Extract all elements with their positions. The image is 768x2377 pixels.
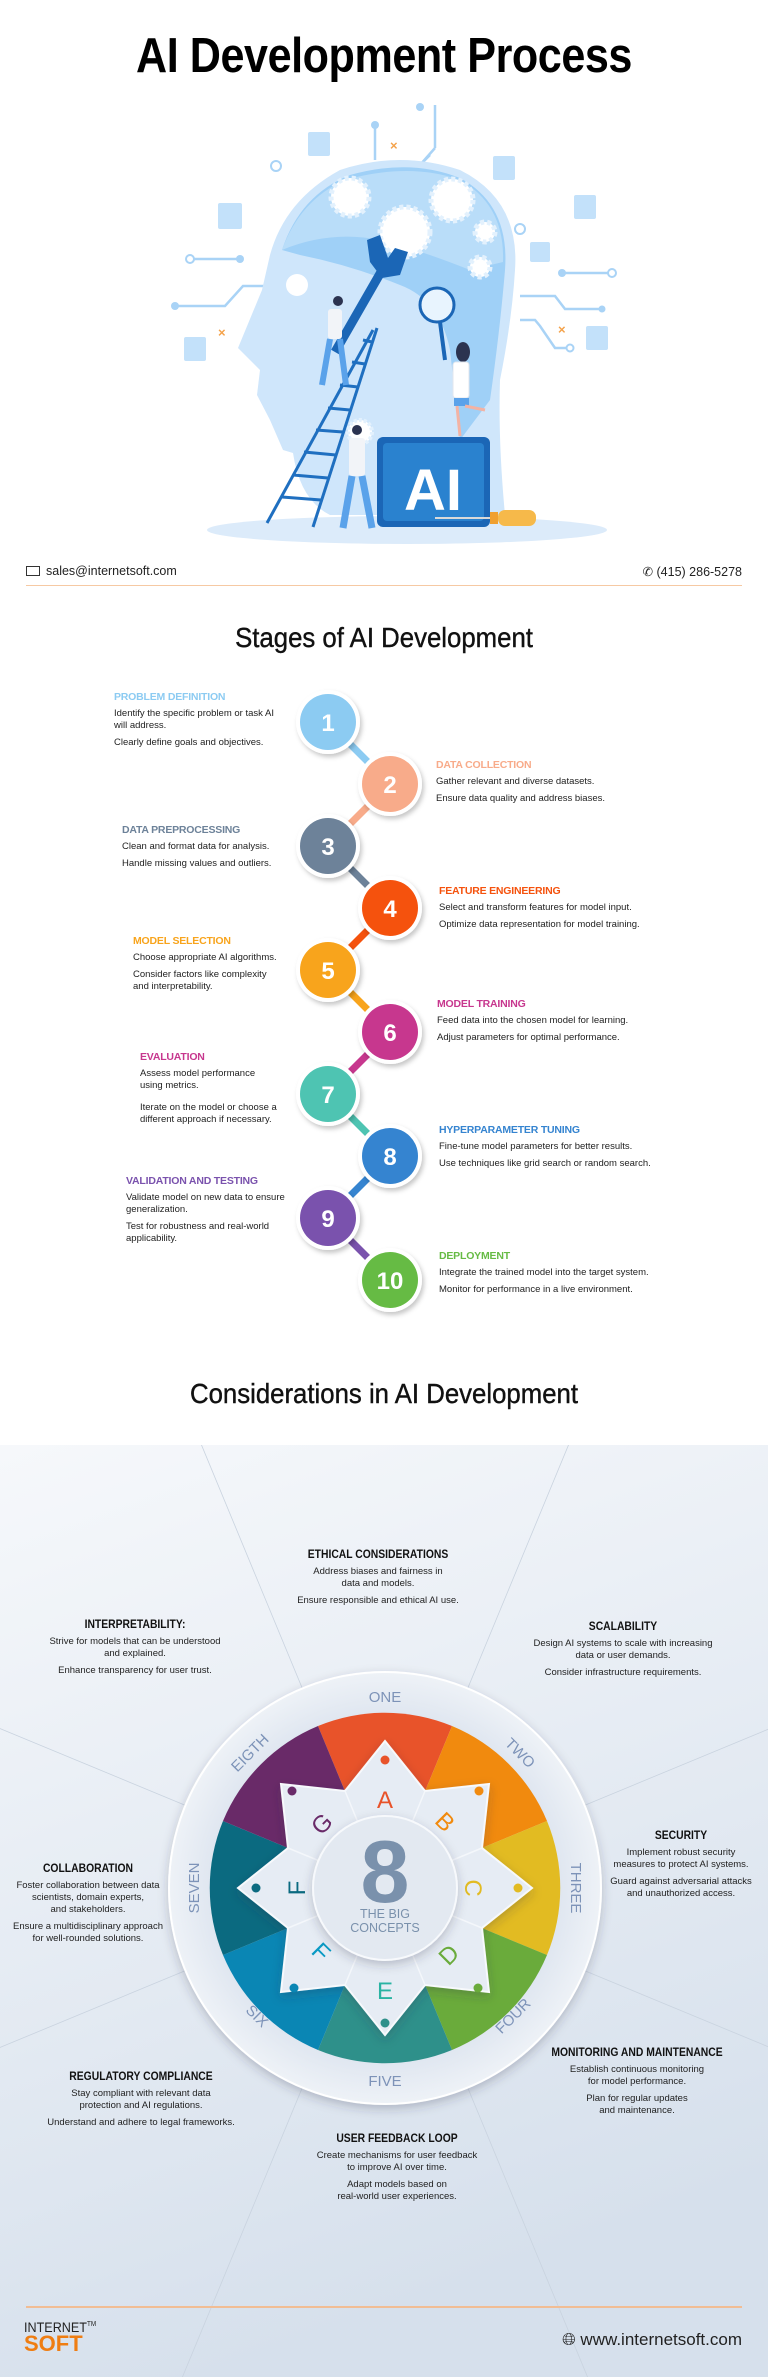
step 5 — [296, 938, 360, 1002]
stage text: problem definition: Clearly define goals and objectives. — [114, 737, 263, 748]
step 3: 3 — [321, 834, 335, 861]
consideration: interpretability: Strive for models that can be understood — [49, 1636, 221, 1647]
stage text: feature engineering: FEATURE ENGINEERING — [439, 885, 560, 897]
stage text: feature engineering: Optimize data representation for model training. — [439, 919, 640, 930]
footer line — [26, 2306, 742, 2308]
person on ladder — [322, 296, 346, 385]
center — [313, 1816, 457, 1960]
ring labels: EIGTH — [228, 1731, 273, 1776]
stage text: model training — [437, 998, 628, 1043]
wrench — [335, 265, 385, 352]
heading: stages: Stages of AI Development — [235, 622, 533, 653]
stage text: evaluation — [140, 1051, 277, 1125]
circuit lines — [175, 105, 612, 348]
woman — [453, 342, 485, 436]
consideration: user feedback — [317, 2133, 478, 2202]
letters: F — [284, 1881, 311, 1895]
consideration: scalability: Design AI systems to scale with increasing — [534, 1638, 712, 1649]
ring labels: SEVEN — [186, 1863, 203, 1913]
step 5: 5 — [321, 958, 335, 985]
stage text: problem definition: will address. — [114, 720, 166, 731]
gears — [331, 178, 495, 277]
stages timeline — [296, 694, 426, 1318]
stage text: deployment: DEPLOYMENT — [439, 1250, 510, 1262]
consideration: user feedback: real-world user experiences. — [337, 2191, 457, 2202]
hero illustration: × — [390, 138, 398, 153]
step 2: 2 — [383, 772, 397, 799]
hero illustration: AI — [404, 458, 462, 523]
consideration: regulatory: protection and AI regulations. — [79, 2100, 203, 2111]
stage text: model training: Feed data into the chosen model for learning. — [437, 1015, 628, 1026]
stage text: problem definition: Identify the specific problem or task AI — [114, 708, 274, 719]
magnifier — [420, 288, 454, 322]
heading: considerations: Considerations in AI Development — [190, 1378, 578, 1409]
consideration: collaboration — [13, 1863, 163, 1944]
stage text: data collection: Ensure data quality and address biases. — [436, 793, 605, 804]
AI box — [377, 437, 490, 527]
hero illustration: × — [218, 325, 226, 340]
stage text: evaluation: Iterate on the model or choose a — [140, 1102, 277, 1113]
consideration: collaboration: for well-rounded solutions. — [33, 1933, 143, 1944]
stage text: model selection: Consider factors like complexity — [133, 969, 267, 980]
consideration: collaboration: and stakeholders. — [50, 1904, 126, 1915]
consideration: ethical — [297, 1549, 459, 1606]
consideration: monitoring: Plan for regular updates — [586, 2093, 688, 2104]
stage text: validation and testing: Validate model on new data to ensure — [126, 1192, 285, 1203]
letters: E — [377, 1978, 393, 2005]
consideration: regulatory: Understand and adhere to legal frameworks. — [47, 2117, 235, 2128]
consideration: interpretability: and explained. — [104, 1648, 166, 1659]
connectors — [328, 722, 390, 1280]
stage text: model training: MODEL TRAINING — [437, 998, 526, 1010]
stage text: evaluation: EVALUATION — [140, 1051, 205, 1063]
code boxes — [184, 132, 608, 361]
star — [238, 1741, 532, 2035]
stage text: hyperparameter tuning — [439, 1124, 651, 1169]
letters — [284, 1787, 486, 2005]
consideration: interpretability — [49, 1619, 221, 1676]
consideration: monitoring: for model performance. — [588, 2076, 686, 2087]
consideration: ethical: data and models. — [342, 1578, 414, 1589]
consideration: monitoring: MONITORING AND MAINTENANCE — [551, 2047, 723, 2059]
stage text: evaluation: using metrics. — [140, 1080, 199, 1091]
stage text: hyperparameter tuning: HYPERPARAMETER TUNING — [439, 1124, 580, 1136]
consideration: user feedback: Adapt models based on — [347, 2179, 447, 2190]
email: sales@internetsoft.com — [46, 564, 177, 578]
ring labels — [186, 1689, 584, 2090]
letters: C — [459, 1879, 486, 1897]
stage text: model selection: Choose appropriate AI algorithms. — [133, 952, 277, 963]
stage text: validation and testing: generalization. — [126, 1204, 188, 1215]
stage text: feature engineering: Select and transform features for model input. — [439, 902, 632, 913]
stage text: evaluation: different approach if necessary. — [140, 1114, 272, 1125]
stage text: validation and testing: applicability. — [126, 1233, 177, 1244]
stage text: evaluation: Assess model performance — [140, 1068, 255, 1079]
consideration: security: measures to protect AI systems. — [613, 1859, 749, 1870]
consideration: user feedback: to improve AI over time. — [347, 2162, 447, 2173]
screwdriver — [435, 517, 490, 519]
consideration: ethical: Address biases and fairness in — [313, 1566, 443, 1577]
step 6 — [358, 1000, 422, 1064]
consideration: user feedback: Create mechanisms for user feedback — [317, 2150, 477, 2161]
step 7 — [296, 1062, 360, 1126]
stage text: hyperparameter tuning: Use techniques like grid search or random search. — [439, 1158, 651, 1169]
dots — [252, 1756, 522, 2028]
ladder — [267, 328, 377, 527]
consideration: monitoring: and maintenance. — [599, 2105, 675, 2116]
step 3 — [296, 814, 360, 878]
stage text: data collection: Gather relevant and diverse datasets. — [436, 776, 594, 787]
ring labels: THREE — [567, 1863, 584, 1913]
step 4: 4 — [383, 896, 397, 923]
stage text: model selection — [133, 935, 277, 992]
stage text: data collection: DATA COLLECTION — [436, 759, 531, 771]
stage text: validation and testing: VALIDATION AND TESTING — [126, 1175, 258, 1187]
website: 🌐︎ www.internetsoft.com — [562, 2330, 742, 2349]
letters: B — [429, 1807, 460, 1838]
step 6: 6 — [383, 1020, 397, 1047]
wheel: 8 — [361, 1822, 409, 1921]
wheel — [169, 1672, 601, 2104]
consideration: user feedback: USER FEEDBACK LOOP — [336, 2133, 458, 2145]
ring labels: SIX — [242, 2002, 271, 2031]
step 9 — [296, 1186, 360, 1250]
logo: SOFT — [24, 2331, 83, 2356]
hero illustration: × — [558, 322, 566, 337]
consideration: ethical: ETHICAL CONSIDERATIONS — [308, 1549, 448, 1561]
consideration: security: and unauthorized access. — [627, 1888, 735, 1899]
consideration: scalability: data or user demands. — [575, 1650, 671, 1661]
stage text: deployment — [439, 1250, 649, 1295]
logo: INTERNETTM — [24, 2319, 96, 2335]
step 9: 9 — [321, 1206, 335, 1233]
wheel: THE BIG — [360, 1907, 410, 1921]
consideration: regulatory — [47, 2071, 235, 2128]
wheel: CONCEPTS — [350, 1921, 420, 1935]
consideration: regulatory: Stay compliant with relevant data — [71, 2088, 211, 2099]
stage text: validation and testing: Test for robustness and real-world — [126, 1221, 269, 1232]
stage text: model selection: MODEL SELECTION — [133, 935, 231, 947]
letters: A — [377, 1787, 393, 1814]
stage text: feature engineering — [439, 885, 640, 930]
consideration: security: Implement robust security — [627, 1847, 735, 1858]
stage text: data preprocessing: DATA PREPROCESSING — [122, 824, 240, 836]
consideration: collaboration: scientists, domain experts, — [32, 1892, 144, 1903]
ring labels: TWO — [501, 1735, 538, 1772]
consideration: security — [610, 1830, 752, 1899]
letters: G — [306, 1808, 339, 1841]
stage text: problem definition: PROBLEM DEFINITION — [114, 691, 225, 703]
step 8 — [358, 1124, 422, 1188]
letters: D — [434, 1940, 465, 1971]
step 10: 10 — [377, 1268, 403, 1295]
stage text: model selection: and interpretability. — [133, 981, 213, 992]
step 2 — [358, 752, 422, 816]
stage text: data preprocessing: Clean and format data for analysis. — [122, 841, 269, 852]
stage text: deployment: Integrate the trained model into the target system. — [439, 1267, 649, 1278]
stage text: validation and testing — [126, 1175, 285, 1244]
logo — [24, 2319, 96, 2356]
consideration: monitoring: Establish continuous monitoring — [570, 2064, 704, 2075]
head — [238, 160, 515, 515]
consideration: monitoring — [551, 2047, 723, 2116]
consideration: collaboration: Ensure a multidisciplinary approach — [13, 1921, 163, 1932]
step 4 — [358, 876, 422, 940]
consideration: ethical: Ensure responsible and ethical AI use. — [297, 1595, 459, 1606]
consideration: scalability: SCALABILITY — [589, 1621, 657, 1633]
consideration: interpretability: Enhance transparency for user trust. — [58, 1665, 212, 1676]
person with gear — [343, 420, 372, 528]
consideration: security: Guard against adversarial attacks — [610, 1876, 752, 1887]
stage text: data preprocessing: Handle missing values and outliers. — [122, 858, 271, 869]
step 1: 1 — [321, 710, 335, 737]
step 8: 8 — [383, 1144, 397, 1171]
title: AI Development Process — [136, 29, 632, 83]
step 1 — [296, 690, 360, 754]
step 10 — [358, 1248, 422, 1312]
ring labels: ONE — [369, 1689, 401, 1706]
stage text: deployment: Monitor for performance in a live environment. — [439, 1284, 633, 1295]
considerations background + wheel — [0, 1445, 768, 2377]
stage text: hyperparameter tuning: Fine-tune model parameters for better results. — [439, 1141, 632, 1152]
letters: F — [306, 1938, 335, 1967]
consideration: collaboration: Foster collaboration between data — [16, 1880, 160, 1891]
ring labels: FOUR — [492, 1995, 534, 2037]
colored segments — [210, 1713, 560, 2063]
stage text: data collection — [436, 759, 605, 804]
phone: ✆ (415) 286-5278 — [643, 565, 742, 579]
consideration: scalability: Consider infrastructure requirements. — [545, 1667, 701, 1678]
consideration: collaboration: COLLABORATION — [43, 1863, 133, 1875]
consideration: scalability — [534, 1621, 712, 1678]
contact row — [26, 562, 742, 586]
stage text: data preprocessing — [122, 824, 271, 869]
stage text: problem definition — [114, 691, 274, 748]
hero illustration — [171, 103, 617, 544]
platform — [207, 516, 607, 544]
stage text: model training: Adjust parameters for optimal performance. — [437, 1032, 620, 1043]
ring labels: FIVE — [368, 2073, 402, 2090]
consideration: interpretability: INTERPRETABILITY: — [85, 1619, 185, 1631]
consideration: security: SECURITY — [655, 1830, 707, 1842]
step 7: 7 — [321, 1082, 335, 1109]
consideration: regulatory: REGULATORY COMPLIANCE — [69, 2071, 213, 2083]
